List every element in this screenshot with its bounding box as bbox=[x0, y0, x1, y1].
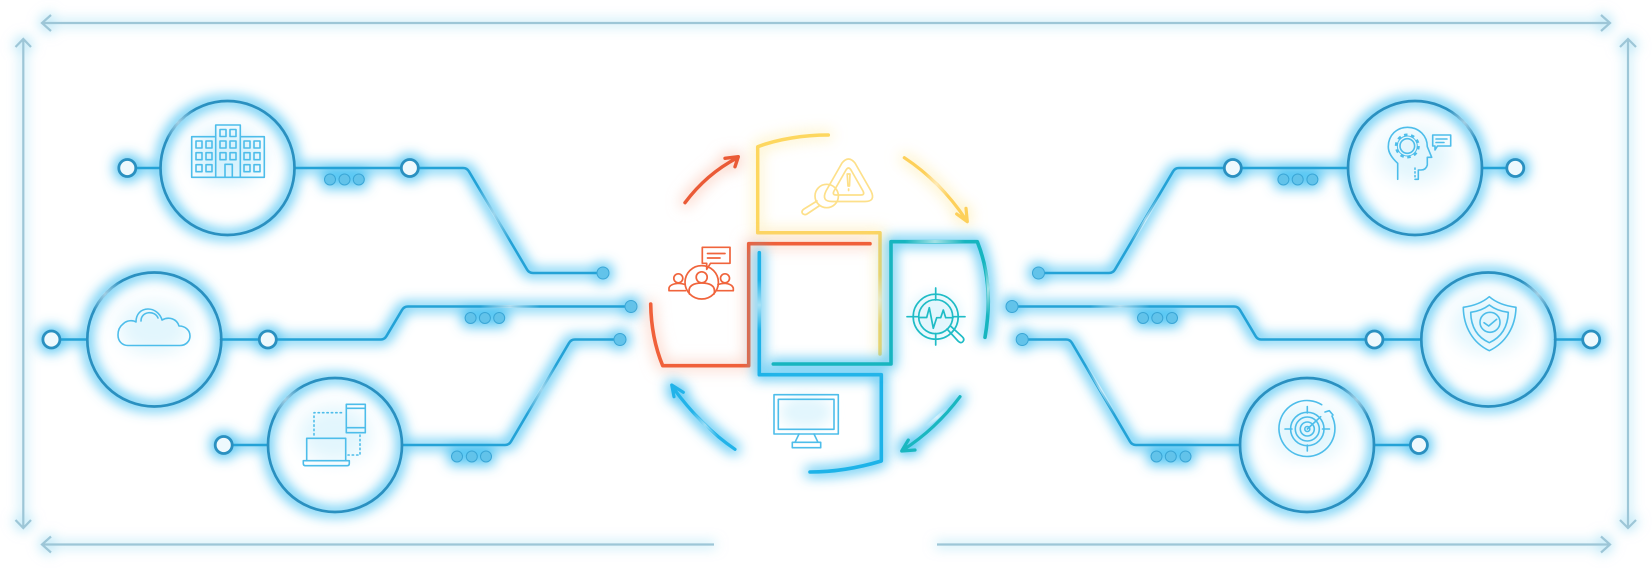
icon: head with gear and speech bubble bbox=[1388, 127, 1451, 179]
circuit: cloud node bbox=[43, 272, 637, 406]
cycle: yellow segment bbox=[758, 135, 967, 354]
icon: cloud bbox=[118, 309, 190, 346]
arrow: red bbox=[685, 157, 738, 203]
cycle: teal segment bbox=[773, 240, 988, 451]
circuit: head with gear node bbox=[1032, 101, 1524, 279]
circuit: shield node bbox=[1006, 272, 1600, 406]
cycle: red segment bbox=[651, 157, 870, 366]
icon: warning and magnifier bbox=[802, 159, 873, 215]
circuit: devices node bbox=[215, 334, 626, 512]
arrow: blue bbox=[672, 385, 735, 449]
icon: office building bbox=[192, 125, 264, 177]
arrow: left vertical bbox=[16, 39, 31, 528]
icon: shield with check bbox=[1463, 297, 1516, 351]
arrow: top bbox=[42, 15, 1610, 31]
icon: radar target bbox=[1279, 400, 1335, 456]
cycle: blue segment bbox=[672, 253, 881, 472]
arrow: bottom right bbox=[937, 536, 1610, 552]
circuit: target node bbox=[1016, 334, 1427, 512]
icon: monitor bbox=[774, 395, 838, 448]
arrow: teal bbox=[902, 397, 960, 451]
icon: laptop and phone bbox=[303, 404, 365, 466]
arrow: yellow bbox=[904, 158, 967, 222]
icon: pulse magnifier target bbox=[907, 288, 965, 345]
circuit: building node bbox=[119, 101, 609, 279]
icon: group with speech bubble bbox=[669, 247, 733, 299]
arrow: right vertical bbox=[1620, 39, 1636, 528]
arrow: bottom left bbox=[42, 536, 714, 552]
center soft light panel bbox=[782, 270, 860, 336]
